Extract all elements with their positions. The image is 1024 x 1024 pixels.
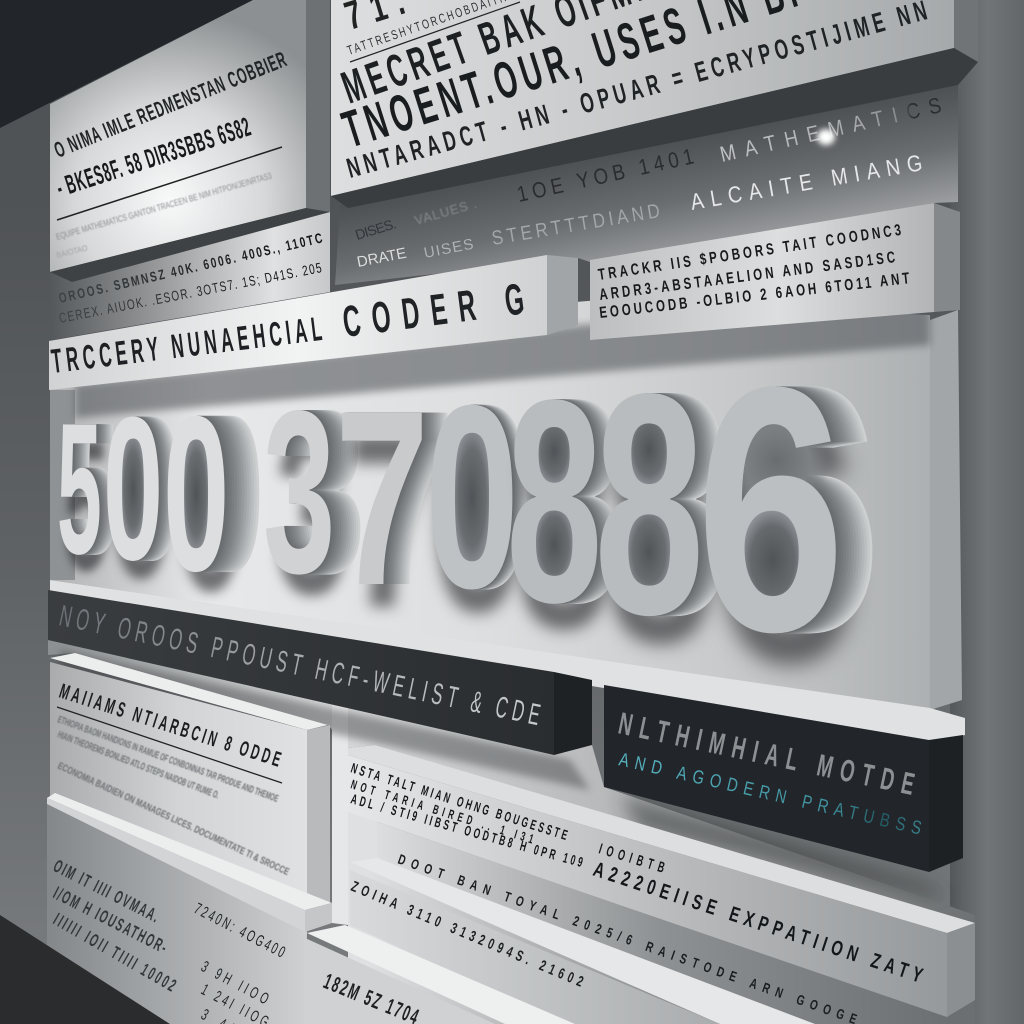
line: algorithms [356, 150, 924, 271]
lower left text block [50, 857, 179, 996]
line: mathematics: 1OE YOB 1401 [515, 145, 696, 207]
line: algorithms: UISES [423, 236, 475, 262]
digit 3: 3 [263, 363, 335, 622]
digit 6: 6 [696, 314, 845, 704]
digit 0 second: 0 [163, 370, 229, 617]
panel: tracery coding band [49, 255, 578, 390]
panel: mathematics card [331, 48, 978, 285]
digit 7: 7 [335, 359, 429, 637]
article body: HIAIN THEOREMS BONLIED ATLO STEPS NAIDOB UT RUME O. [56, 730, 221, 801]
panel: dark label band [48, 590, 592, 790]
digit 5: 5 [57, 384, 102, 593]
pillar between lower panels [332, 695, 348, 925]
lower left text block: OIM IT IIII OVMAA. [50, 857, 162, 927]
expiration strip text: A2220EIISE EXPPATIION ZATY [591, 857, 926, 987]
article body: ECONOMIA BAIDIEN ON MANAGES LICES. DOCUMENTATE TI & SROCCE [56, 761, 291, 878]
dark band label: NOY OROOS PPOUST HCF-WELIST & CDE [56, 600, 543, 732]
card subheading: - BKES8F. 58 DIR3SBBS 6S82 [53, 113, 254, 203]
expiration strip text: NSTA TALT MIAN OHNG BOUGESSTE [349, 762, 569, 844]
panel: lower left wall card [47, 797, 307, 1024]
expiration strip text: NOT TARIA BIRED .. 1 I31 [349, 778, 535, 847]
card fine print: BAIOTAO [55, 243, 89, 260]
article heading: MAIIAMS NTIARBCIN 8 ODDE [57, 679, 284, 772]
expiration strip text: IOOIBTB [597, 840, 667, 876]
line: algorithms: ALCAITE MIANG [689, 150, 924, 215]
expiration strip text: ADL / STI9 IIBST OODTB8 H 0PR 109 [349, 792, 584, 871]
line: mathematics: MATHEMATICS [718, 94, 944, 167]
digit 8 second: 8 [594, 328, 704, 680]
article body: ETHIOPIA BAOM HANDIONS IN RAMUE OF CONBONNAS TAR PRODUE AND THEMOE [56, 714, 280, 805]
band title: TRCCERY NUNAEHCIAL [49, 310, 324, 381]
lower left numbers: 7240N: 4OG400 [191, 899, 288, 961]
lower left numbers [191, 899, 288, 1024]
digit 8: 8 [506, 340, 602, 663]
notes text: TRACKR IIS $POBORS TAIT COODNC3 [597, 220, 902, 283]
band title [49, 274, 527, 381]
line: algorithms: DRATE [356, 245, 408, 271]
wall under numerals [48, 640, 975, 925]
line: mathematics: DISES. [353, 215, 398, 243]
strip text: OROOS. SBMNSZ 40K. 6006. 400S., 110TC [57, 230, 324, 306]
panel: bottom left article card [47, 653, 332, 932]
notes text [597, 220, 911, 321]
panel: upper right headline card [331, 0, 978, 196]
line: mathematics [353, 94, 944, 243]
line: algorithms: STERTTTDIAND [490, 199, 661, 249]
card title: NLTHIMHIAL MOTDE [615, 707, 917, 802]
card heading: O NIMA IMLE REDMENSTAN COBBIER [51, 47, 290, 163]
card fine print: EQUIPE MATHEMATICS GANTON TRACEEN BE NIM HITPON/JEINRTAS3 [55, 171, 273, 242]
panel: lower ledge strip [305, 858, 815, 1024]
band title: CODER G [340, 274, 527, 347]
notes text: EOOUCODB -OLBIO 2 6AOH 6TO11 ANT [598, 268, 911, 321]
panel: dark number strip [50, 208, 330, 340]
panel: tracking notes card [590, 203, 960, 340]
ledge numbers: ZOIHA 3110 3132094S. 21602 [349, 877, 586, 990]
digit 0: 0 [103, 375, 163, 603]
expiration strip text [349, 762, 926, 987]
panel: main numeral board [50, 300, 962, 710]
card teal subtitle: AND AGODERN PRATUBSS [617, 749, 923, 839]
lower left numbers: 3 9H IIOO [198, 957, 272, 1008]
strip text: CEREX. AIUOK. .ESOR. 3OTS7. 1S; D41S. 205 [58, 260, 323, 326]
panel: upper left title card [50, 0, 330, 272]
card fine print [55, 171, 273, 260]
line: mathematics: VALUES . [413, 196, 478, 228]
panel: expiration strip [348, 745, 975, 1024]
highlight glint [817, 129, 835, 145]
digit 0 third: 0 [425, 352, 519, 643]
notes text: ARDR3-ABSTAAELION AND SASD1SC [598, 247, 896, 303]
article body [56, 714, 291, 878]
recessed line text: DOOT BAN TOYAL 2025/6 RAISTODE ARN GOOGE [396, 851, 859, 1024]
lower left text block: I/OM H IOUSATHOR- [50, 884, 170, 958]
lower left text block: IIIIII IOII TIIII 10002 [50, 910, 179, 996]
panel: dark modern practices card [604, 685, 963, 900]
shelf under numerals [50, 580, 965, 742]
